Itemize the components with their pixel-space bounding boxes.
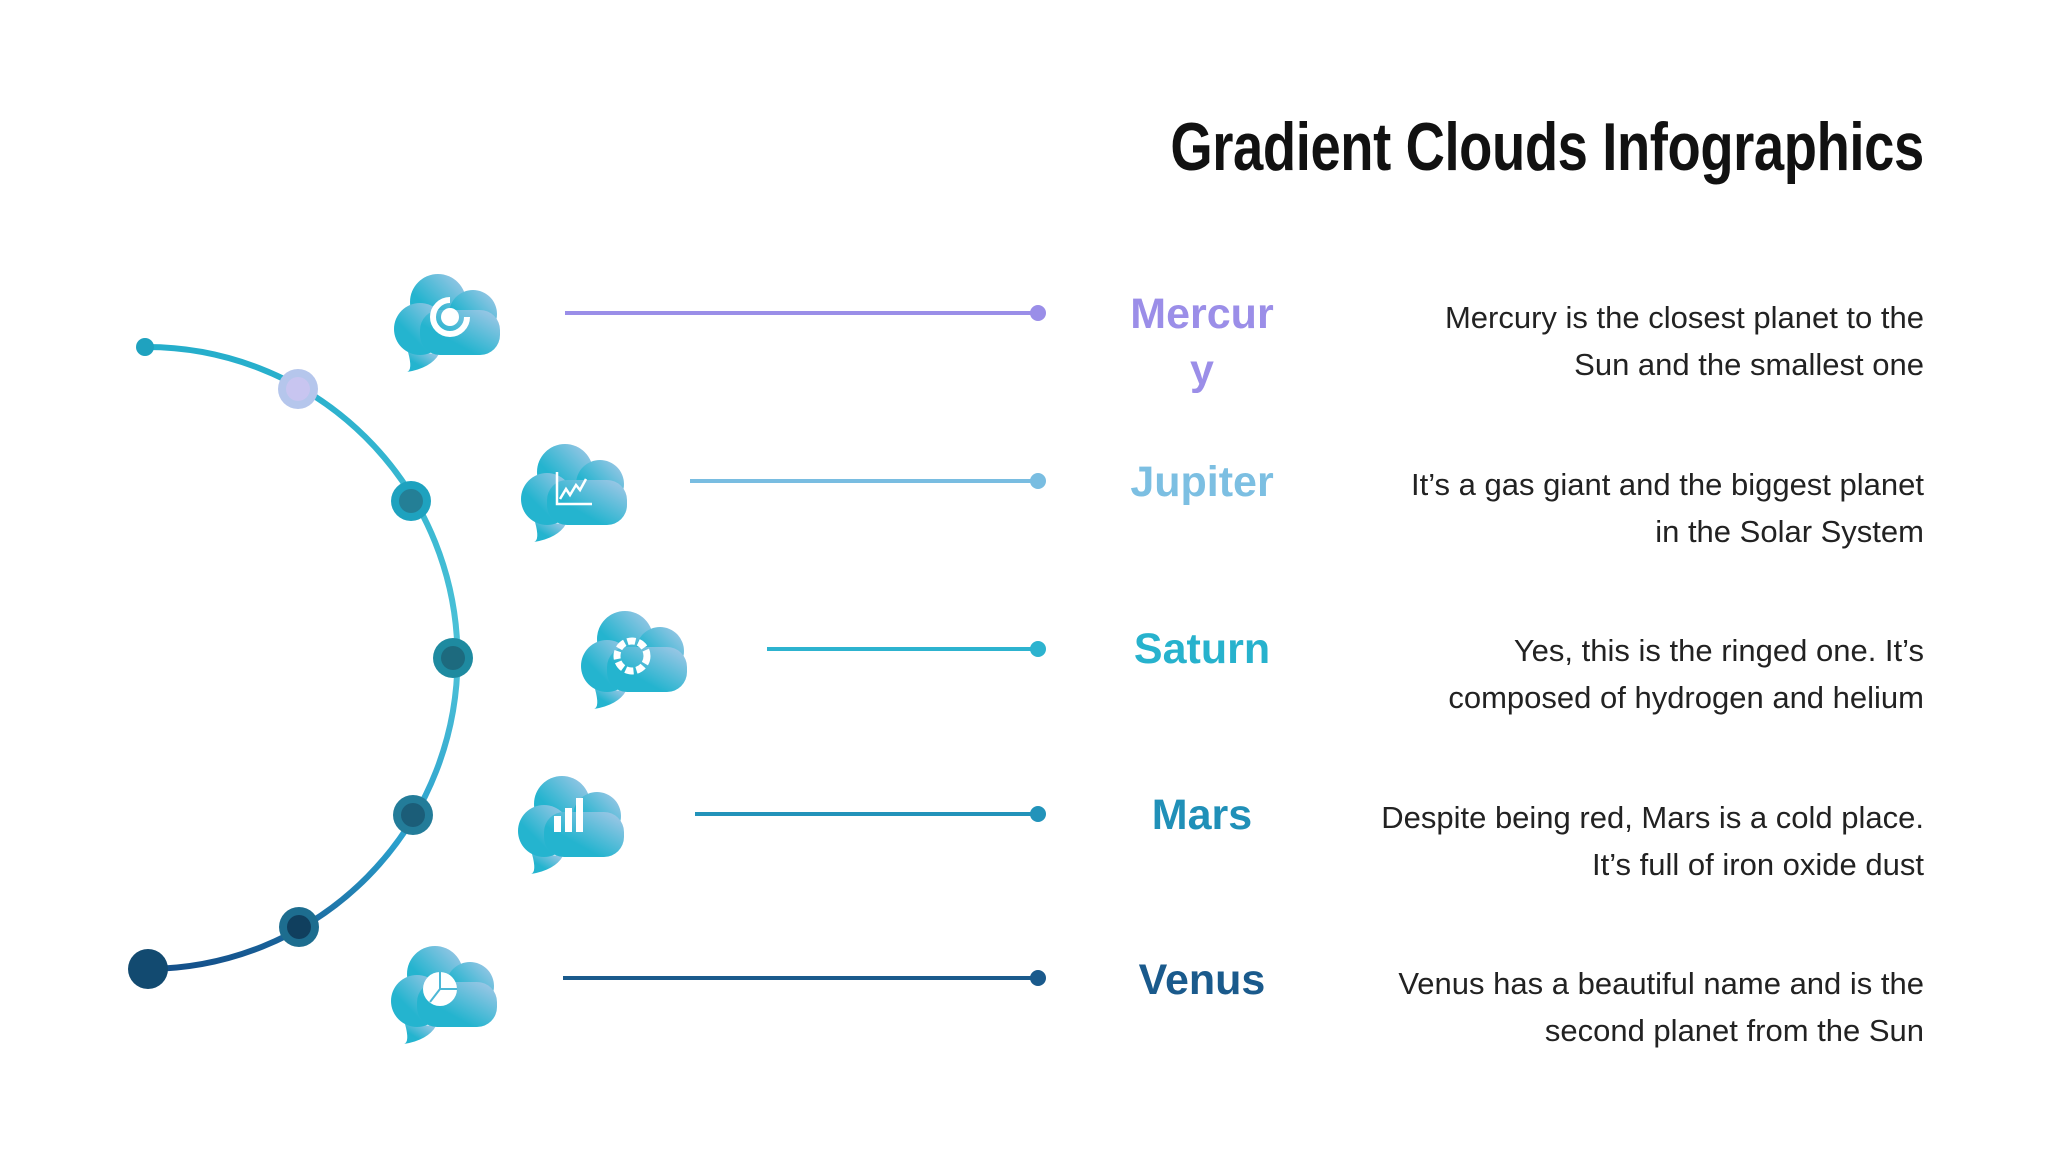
label: Mercury: Mercury (1130, 290, 1274, 394)
desc: Jupiter: It’s a gas giant and the biggest planet in the Solar System (1411, 467, 1924, 549)
title: Gradient Clouds Infographics (1171, 109, 1924, 185)
label: Mars: Mars (1152, 791, 1252, 839)
icon: cloud ring (581, 611, 687, 709)
arc (128, 338, 473, 989)
connector lines (563, 305, 1046, 986)
label: Saturn: Saturn (1134, 625, 1270, 673)
icon: cloud line chart (521, 444, 627, 542)
desc: Venus: Venus has a beautiful name and is the second planet from the Sun (1398, 966, 1924, 1048)
desc: Mars: Despite being red, Mars is a cold place. It’s full of iron oxide dust (1381, 800, 1924, 882)
cloud icons (391, 274, 687, 1044)
label: Jupiter: Jupiter (1130, 458, 1274, 506)
icon: cloud donut (394, 274, 500, 372)
label: Venus: Venus (1139, 956, 1265, 1004)
icon: cloud pie chart (391, 946, 497, 1044)
desc: Mercury: Mercury is the closest planet to the Sun and the smallest one (1445, 300, 1924, 382)
desc: Saturn: Yes, this is the ringed one. It’s composed of hydrogen and helium (1448, 633, 1924, 715)
icon: cloud bar chart (518, 776, 624, 874)
